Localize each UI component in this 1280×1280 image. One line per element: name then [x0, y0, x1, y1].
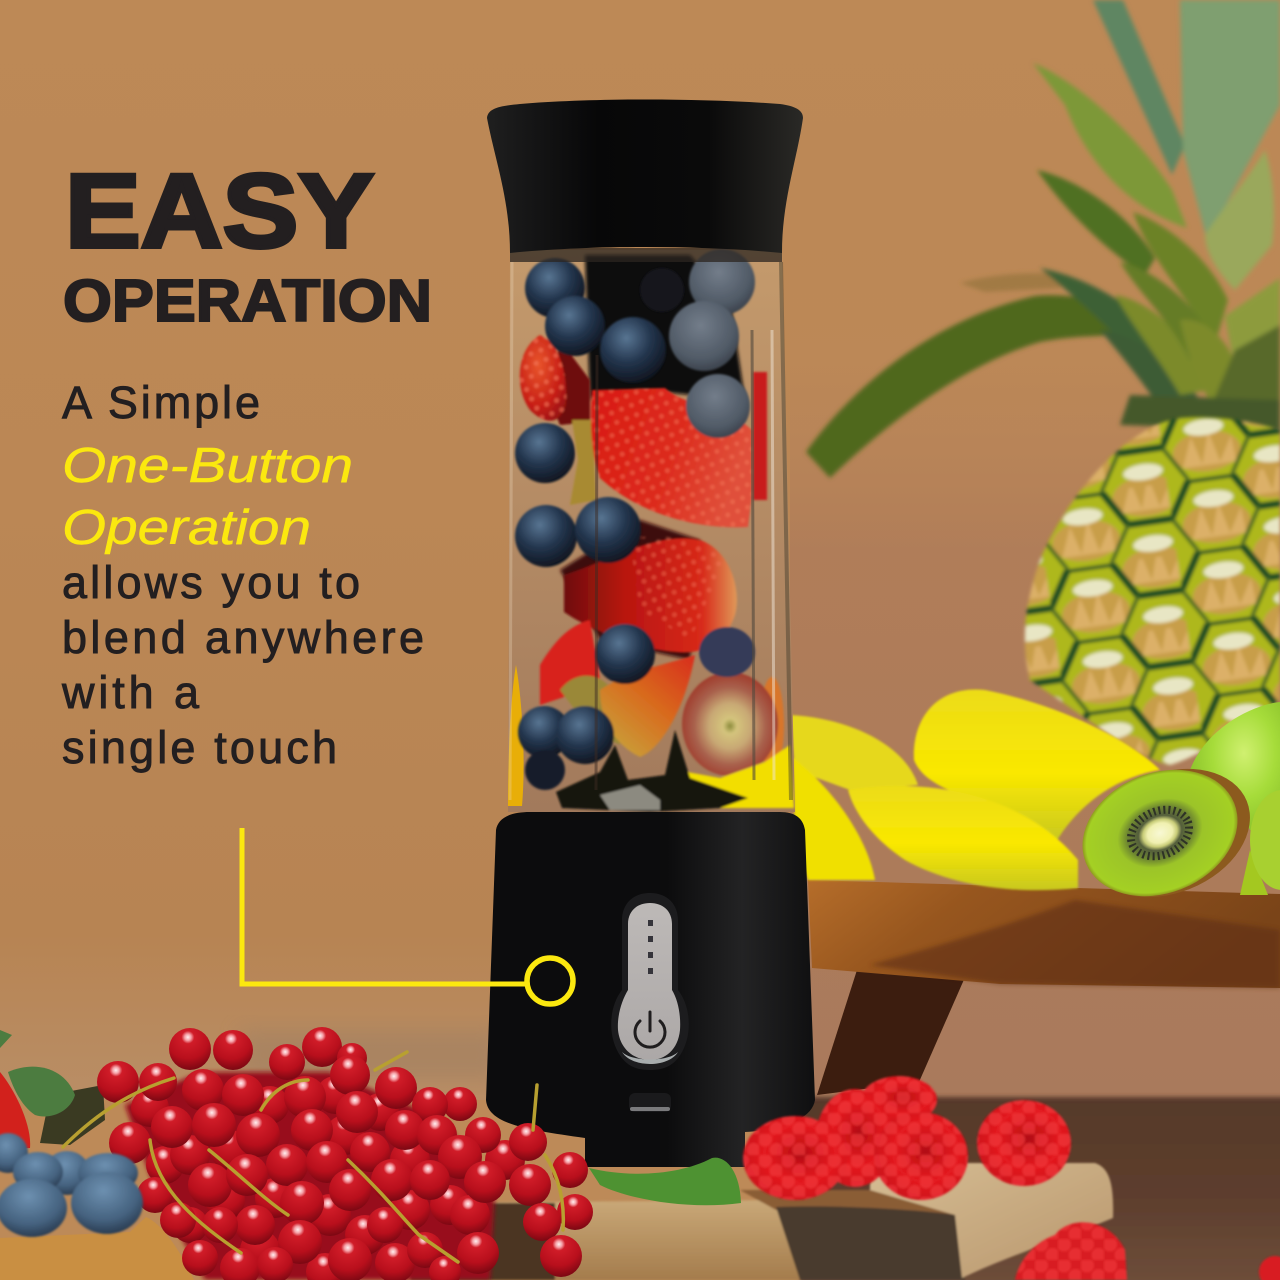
body text: single touch: [62, 722, 337, 773]
board left face: [411, 1200, 800, 1280]
stand leg: [817, 970, 966, 1095]
shadow strip behind currants: [240, 1030, 500, 1080]
blender: [486, 100, 815, 1167]
shadowed board under currants: [411, 1203, 555, 1280]
jar top collar: [510, 248, 782, 262]
wooden fruit stand: [808, 880, 1280, 1095]
board top surface: [740, 1190, 965, 1215]
dark interior behind fruit: [585, 255, 745, 400]
left yellow reflection: [508, 665, 524, 806]
callout line and ring: [242, 828, 573, 1004]
raspberries: [743, 1076, 1280, 1280]
currant mass: [125, 1072, 495, 1280]
lower glow ring: [622, 1052, 678, 1064]
indicator dots: [648, 920, 653, 974]
green apple: [1190, 702, 1280, 830]
panel recess: [611, 893, 689, 1070]
mint leaf on board: [589, 1158, 741, 1205]
bark section: [776, 1206, 965, 1280]
blades: [556, 730, 748, 812]
body text: with a: [61, 667, 200, 718]
board right light section: [870, 1163, 1113, 1278]
USB port: [629, 1093, 671, 1112]
bananas: [790, 689, 1160, 890]
silver panel: [618, 903, 680, 1060]
title line: OPERATION: OPERATION: [63, 268, 432, 334]
yellow highlighted phrase: One-Button: [62, 439, 353, 493]
blueberries: [515, 258, 755, 790]
red currants: [63, 1027, 593, 1280]
shaded wall right of blender: [790, 250, 1280, 1100]
title line: EASY: EASY: [65, 153, 374, 270]
wooden board: [411, 1163, 1113, 1280]
kiwi slices: [1063, 746, 1280, 920]
yellow highlighted phrase: [62, 439, 353, 555]
body text: A Simple: [62, 377, 260, 428]
control panel: [611, 893, 689, 1070]
body text: [61, 377, 424, 773]
blender lid: [487, 100, 803, 253]
currant berries: [97, 1027, 593, 1280]
dark table top right: [800, 1097, 1280, 1280]
body text: allows you to: [62, 557, 360, 608]
pineapple body: [1025, 417, 1280, 765]
pineapple: [806, 0, 1280, 765]
blueberries pile: [0, 1133, 143, 1237]
strawberry and leaf left edge: [0, 1030, 105, 1150]
currant stems: [63, 1052, 563, 1262]
stand plate: [808, 880, 1280, 988]
dark red interior: [560, 520, 700, 660]
power icon: [635, 1012, 665, 1047]
blender jar: [508, 250, 795, 812]
body text: blend anywhere: [62, 612, 424, 663]
title: [63, 153, 432, 334]
yellow reflection at jar bottom: [675, 745, 794, 808]
blender base: [486, 812, 815, 1167]
hazy blueberries: [669, 249, 755, 371]
left wooden block: [0, 1217, 194, 1280]
yellow highlighted phrase: Operation: [62, 501, 311, 555]
fruit in jar: [515, 249, 794, 812]
strawberries: [520, 335, 784, 776]
pineapple leaves: [806, 0, 1280, 478]
glass highlights: [510, 262, 791, 800]
wood grain: [870, 900, 1280, 988]
